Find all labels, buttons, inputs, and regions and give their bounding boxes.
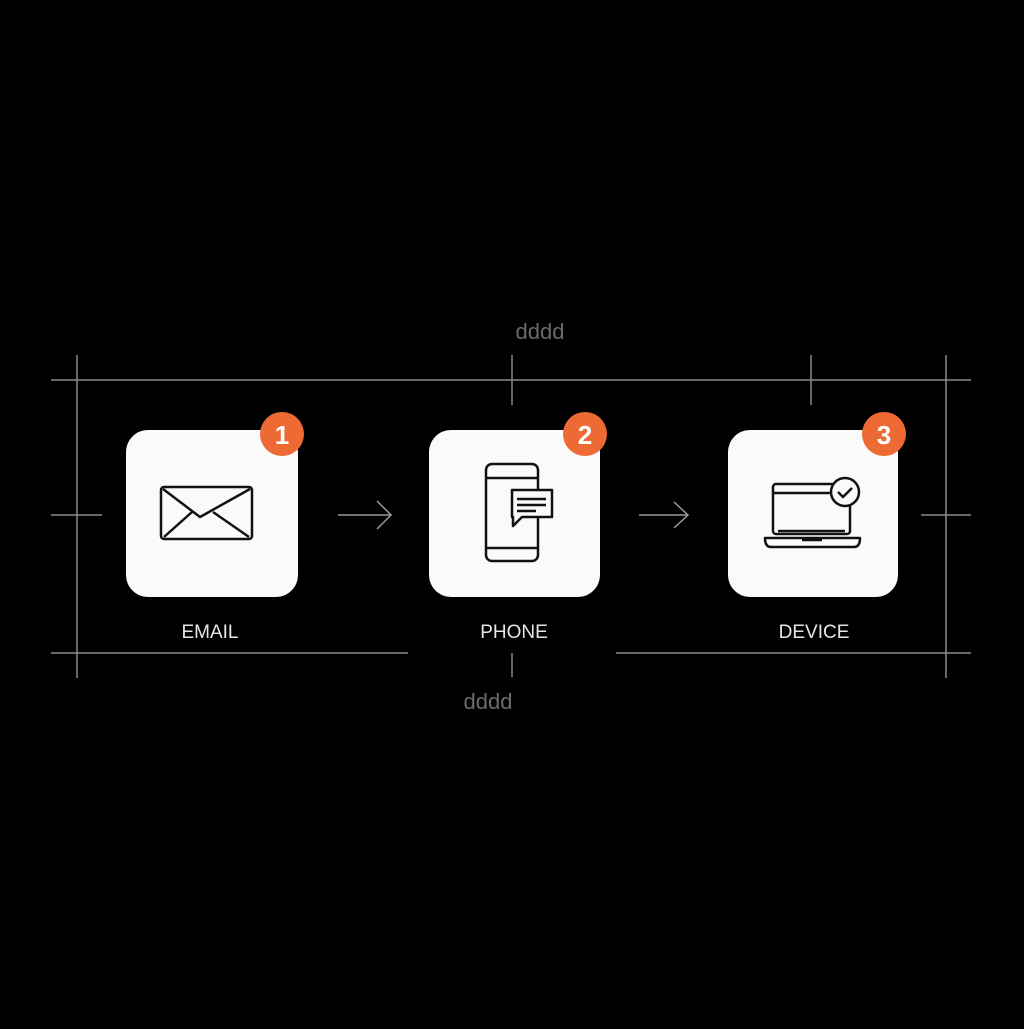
arrow 2 — [639, 502, 688, 528]
label: PHONE — [480, 622, 548, 643]
step 3: device — [728, 412, 906, 643]
annotation top: dddd — [516, 319, 564, 344]
badge 1 — [260, 412, 304, 456]
badge 2 — [563, 412, 607, 456]
label: EMAIL — [181, 622, 239, 643]
step 1: email — [126, 412, 304, 643]
icon: laptop with check — [765, 478, 860, 547]
arrow 1 — [338, 501, 391, 529]
badge 3 — [862, 412, 906, 456]
label: DEVICE — [779, 622, 849, 643]
step 2: phone — [429, 412, 607, 643]
badge 3: 3 — [877, 420, 891, 450]
badge 2: 2 — [578, 420, 592, 450]
badge 1: 1 — [275, 420, 289, 450]
annotation bottom: dddd — [464, 689, 512, 714]
icon: phone with chat — [486, 464, 552, 561]
icon: envelope — [161, 487, 252, 539]
